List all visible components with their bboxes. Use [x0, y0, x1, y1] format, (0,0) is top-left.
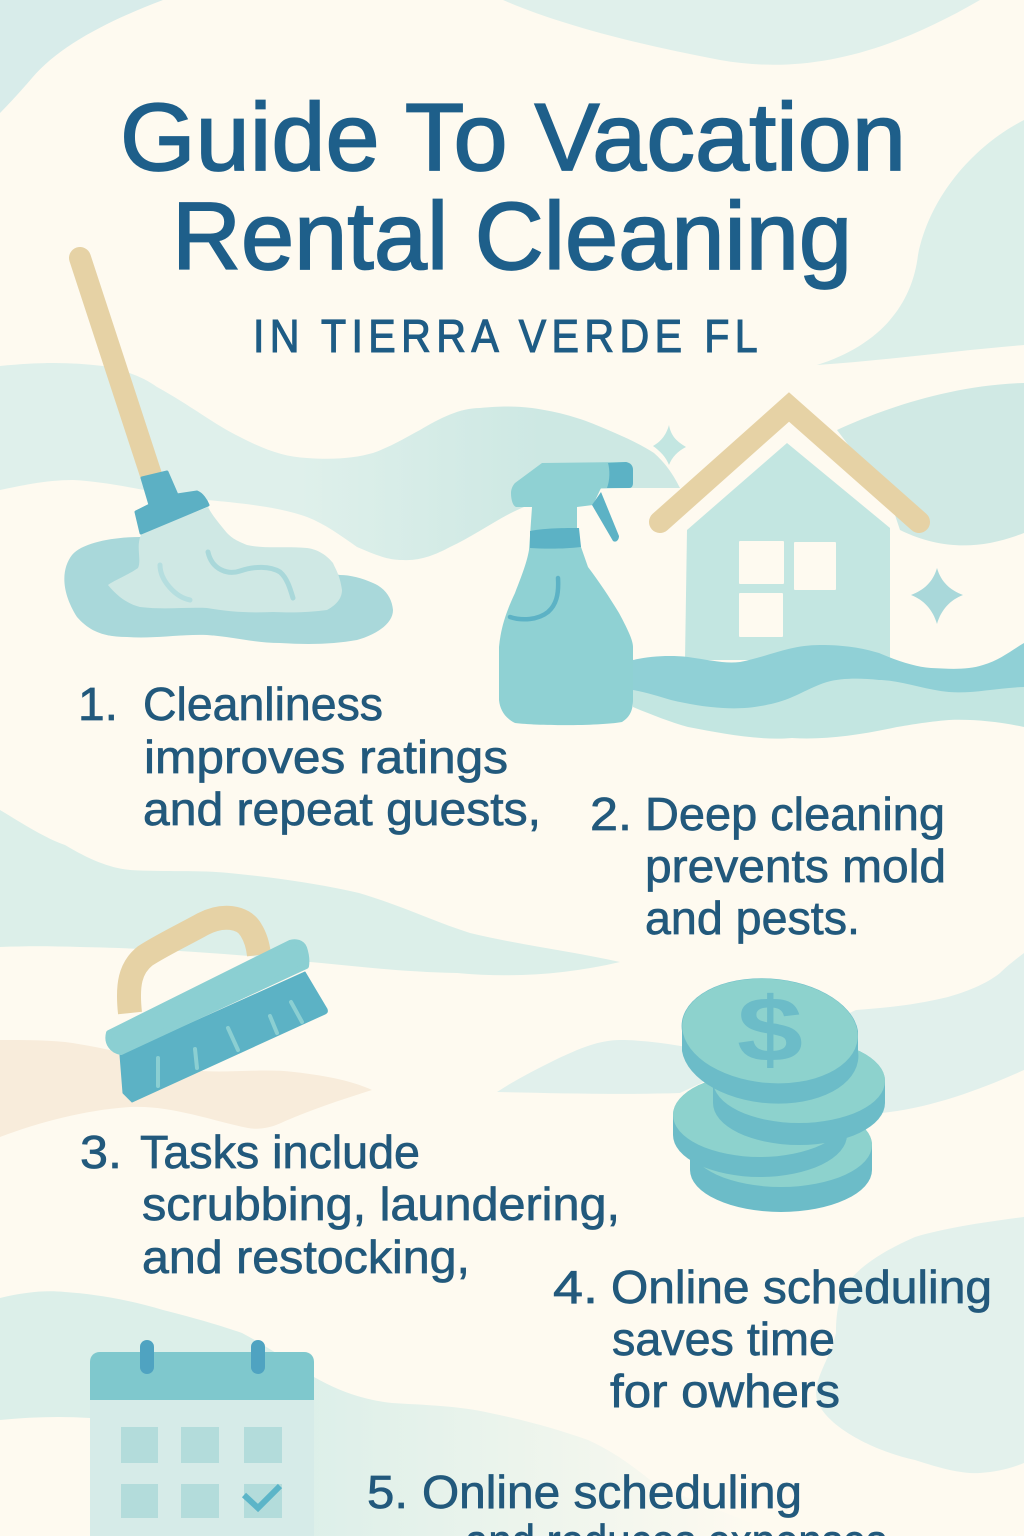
- item 4: [553, 1261, 992, 1417]
- title: [120, 84, 906, 290]
- dollar sign: $: [737, 979, 803, 1081]
- item 3: 3.: [80, 1126, 122, 1178]
- item 3: [80, 1126, 620, 1283]
- item 5: [367, 1466, 887, 1536]
- icon: sparkle right: [911, 568, 963, 624]
- icon: scrub brush: [108, 918, 327, 1102]
- item 5: Online scheduling: [422, 1466, 802, 1518]
- item 4: Online scheduling: [611, 1261, 992, 1313]
- item 4: saves time: [612, 1313, 835, 1365]
- title: Guide To Vacation: [120, 84, 906, 191]
- item 3: scrubbing, laundering,: [142, 1178, 620, 1230]
- item 4: for owhers: [610, 1365, 840, 1417]
- item 4: 4.: [553, 1261, 598, 1313]
- item 1: Cleanliness: [143, 678, 383, 730]
- icon: coin stack: [673, 972, 885, 1212]
- item 3: and restocking,: [142, 1231, 470, 1283]
- item 1: [78, 678, 541, 835]
- item 2: [590, 788, 946, 944]
- icon: house: [660, 407, 919, 660]
- item 5: 5.: [367, 1466, 408, 1518]
- title: Rental Cleaning: [172, 183, 852, 290]
- item 1: and repeat guests,: [143, 783, 541, 835]
- item 2: 2.: [590, 788, 632, 840]
- item 2: and pests.: [645, 892, 860, 944]
- icon: spray bottle: [499, 462, 633, 725]
- item 3: Tasks include: [140, 1126, 420, 1178]
- item 2: Deep cleaning: [645, 788, 945, 840]
- subtitle: IN TIERRA VERDE FL: [253, 310, 763, 362]
- wave: water band: [633, 643, 1024, 708]
- item 1: improves ratings: [144, 731, 508, 783]
- item 2: prevents mold: [645, 840, 946, 892]
- icon: mop on puddle: [64, 258, 393, 644]
- item 1: 1.: [78, 678, 118, 730]
- icon: sparkle top: [653, 425, 686, 465]
- icon: calendar: [90, 1340, 314, 1536]
- wave: light band under house: [633, 666, 1024, 739]
